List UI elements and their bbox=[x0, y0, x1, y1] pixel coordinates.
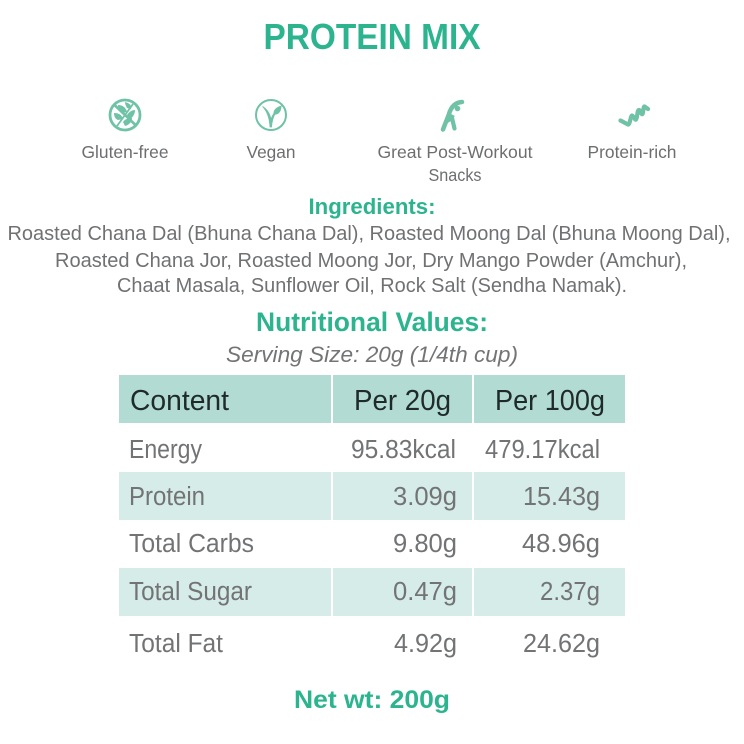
label second line: Snacks bbox=[428, 165, 482, 185]
icon: crossed-out wheat bbox=[110, 100, 140, 130]
table header bbox=[119, 375, 625, 423]
label: Protein-rich bbox=[588, 142, 676, 162]
row: total carbs: 48.96g bbox=[522, 530, 600, 558]
row: protein: 15.43g bbox=[523, 483, 600, 511]
row: total sugar: 2.37g bbox=[540, 578, 600, 606]
badge: vegan bbox=[246, 100, 296, 162]
row: energy: 95.83kcal bbox=[351, 436, 456, 464]
nutritional values heading: Nutritional Values: bbox=[256, 307, 488, 337]
row: protein: Protein bbox=[129, 483, 205, 511]
label: Vegan bbox=[246, 142, 296, 162]
serving size: Serving Size: 20g (1/4th cup) bbox=[226, 342, 518, 367]
title: PROTEIN MIX bbox=[264, 16, 480, 57]
ingredients heading: Ingredients: bbox=[308, 194, 436, 219]
ingredients text bbox=[8, 223, 730, 297]
row: energy bbox=[129, 436, 600, 464]
row: total fat: 24.62g bbox=[523, 630, 600, 658]
net weight: Net wt: 200g bbox=[294, 686, 450, 714]
ingredients text: Roasted Chana Jor, Roasted Moong Jor, Dry Mango Powder (Amchur), bbox=[55, 250, 687, 272]
row: total fat: 4.92g bbox=[394, 630, 457, 658]
table header: Per 20g bbox=[354, 385, 451, 417]
label: Great Post-Workout bbox=[378, 142, 533, 162]
label: Gluten-free bbox=[82, 142, 168, 162]
row: energy: Energy bbox=[129, 436, 202, 464]
table header: Content bbox=[130, 385, 229, 417]
badge: gluten-free bbox=[82, 100, 168, 162]
badge: post-workout bbox=[378, 102, 533, 185]
row: total carbs bbox=[129, 530, 600, 558]
nutrition table bbox=[119, 375, 625, 658]
row: protein bbox=[119, 472, 625, 520]
row: total fat: Total Fat bbox=[129, 630, 223, 658]
table header: Per 100g bbox=[495, 385, 605, 417]
icon: protein wave bbox=[620, 106, 648, 125]
row: total carbs: 9.80g bbox=[393, 530, 457, 558]
row: protein: 3.09g bbox=[393, 483, 457, 511]
icon: stretching figure bbox=[443, 102, 462, 130]
row: total sugar: Total Sugar bbox=[129, 578, 252, 606]
row: total fat bbox=[129, 630, 600, 658]
row: total sugar bbox=[119, 568, 625, 616]
row: total sugar: 0.47g bbox=[393, 578, 457, 606]
ingredients text: Roasted Chana Dal (Bhuna Chana Dal), Roasted Moong Dal (Bhuna Moong Dal), bbox=[8, 223, 730, 245]
icon: V leaf bbox=[256, 100, 286, 130]
row: energy: 479.17kcal bbox=[485, 436, 600, 464]
row: total carbs: Total Carbs bbox=[129, 530, 254, 558]
ingredients text: Chaat Masala, Sunflower Oil, Rock Salt (Sendha Namak). bbox=[117, 275, 627, 297]
badge: protein-rich bbox=[588, 106, 676, 162]
